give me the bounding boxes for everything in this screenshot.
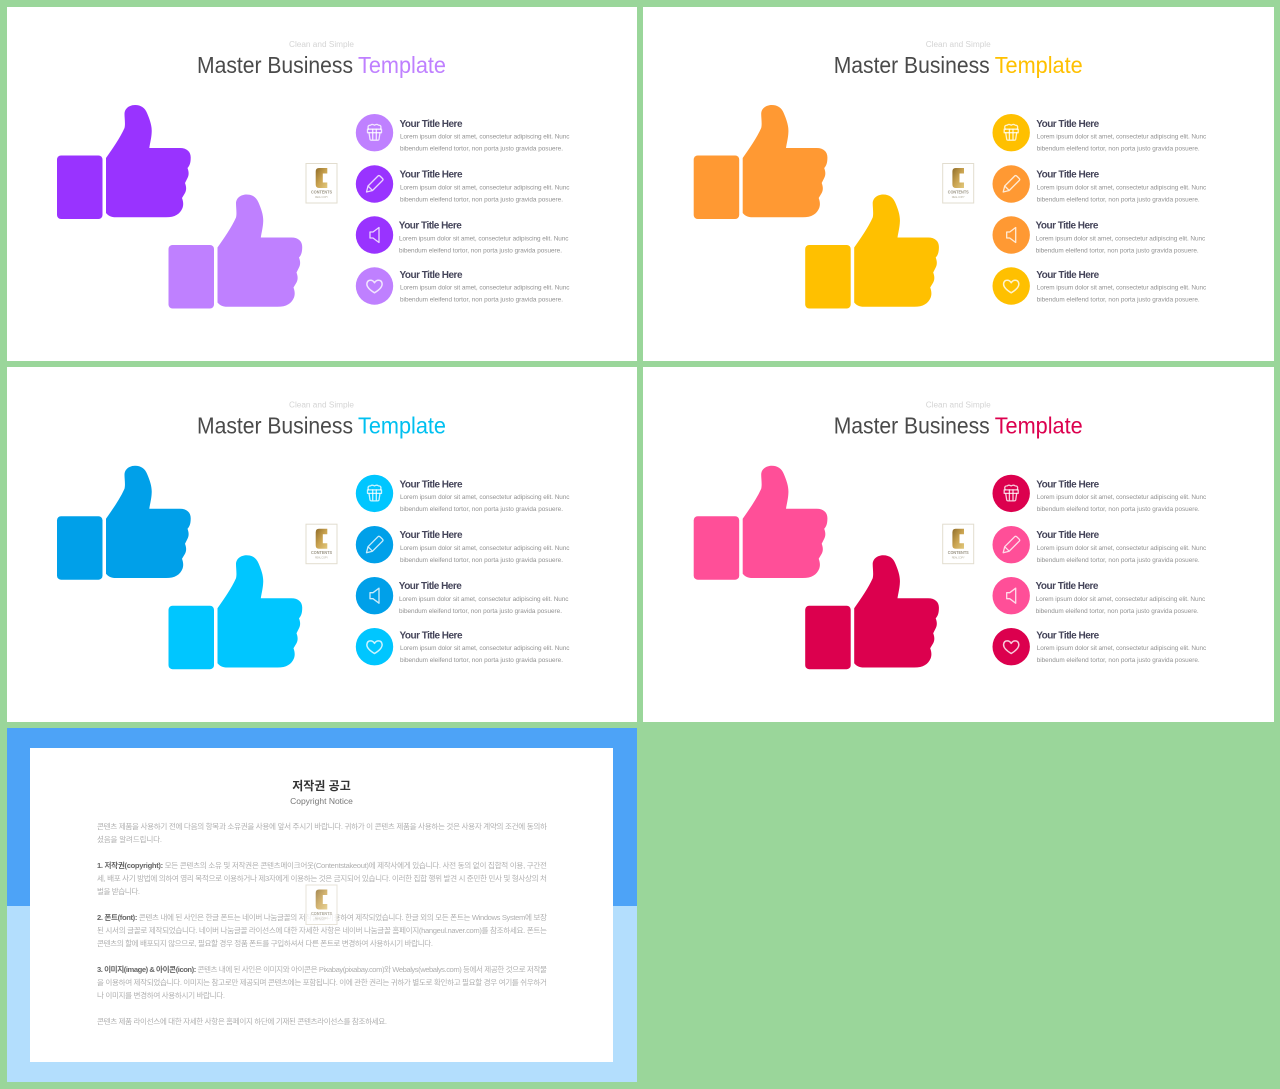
logo overlay xyxy=(306,885,337,924)
item 2 xyxy=(992,526,1207,564)
item 2: bibendum eleifend tortor, non porta justo gravida posuere. xyxy=(400,196,563,204)
logo xyxy=(943,524,974,564)
item 2: Your Title Here xyxy=(400,530,463,541)
copyright subheading: Copyright Notice xyxy=(290,796,353,806)
intro paragraph: 콘텐츠 제품을 사용하기 전에 다음의 항목과 소유권을 사용에 앞서 주시기 바랍니다. 귀하가 이 콘텐츠 제품을 사용하는 것은 사용자 계약의 조건에 동의하 xyxy=(97,821,547,831)
title xyxy=(834,52,1083,78)
section 1: copyright: 세, 배포 사기 방법에 의하여 영리 목적으로 이용하거나 제3자에게 이용하는 것은 금지되어 있습니다. 이러한 집합 행위 발견 시 준민한 민사 및 형사상의 처 xyxy=(97,873,547,883)
item 3 xyxy=(992,577,1206,615)
logo: REAL COPY xyxy=(315,556,328,560)
item 3: bibendum eleifend tortor, non porta justo gravida posuere. xyxy=(1036,608,1199,615)
panel: pink slide xyxy=(643,367,1274,722)
title: Template xyxy=(358,413,446,439)
item 2: Lorem ipsum dolor sit amet, consectetur adipiscing elit. Nunc xyxy=(1037,184,1207,192)
section 3: image and icon: 3. 이미지(image) & 아이콘(icon): 콘텐츠 내에 된 사인은 이미지와 아이콘은 Pixabay(pixabay.com)와 Webalys(webalys.com) 등에서 제공한 것으로 저작물 xyxy=(97,964,547,974)
title xyxy=(834,413,1083,439)
item 1: Lorem ipsum dolor sit amet, consectetur adipiscing elit. Nunc xyxy=(1037,134,1207,140)
closing note: 콘텐츠 제품 라이선스에 대한 자세한 사항은 홈페이지 하단에 기재된 콘텐츠라이선스를 참조하세요. xyxy=(97,1016,387,1026)
item 3: Lorem ipsum dolor sit amet, consectetur adipiscing elit. Nunc xyxy=(1036,236,1206,242)
item 1 xyxy=(992,475,1207,513)
eyebrow text: Clean and Simple xyxy=(289,401,355,410)
intro paragraph xyxy=(97,821,547,844)
item 1: bibendum eleifend tortor, non porta justo gravida posuere. xyxy=(400,506,563,513)
item 4: bibendum eleifend tortor, non porta justo gravida posuere. xyxy=(1037,296,1200,304)
panel: blue slide xyxy=(7,367,637,722)
logo overlay: CONTENTS xyxy=(311,911,333,917)
item 1: bibendum eleifend tortor, non porta justo gravida posuere. xyxy=(1037,146,1200,152)
icon: cyan thumbs up xyxy=(168,555,302,669)
item 3: Lorem ipsum dolor sit amet, consectetur adipiscing elit. Nunc xyxy=(399,236,569,242)
item 2: bibendum eleifend tortor, non porta justo gravida posuere. xyxy=(400,557,563,564)
item 4: Lorem ipsum dolor sit amet, consectetur adipiscing elit. Nunc xyxy=(400,284,570,292)
title: Master Business xyxy=(197,413,353,439)
item 4: bibendum eleifend tortor, non porta justo gravida posuere. xyxy=(400,657,563,664)
item 1: bibendum eleifend tortor, non porta justo gravida posuere. xyxy=(1037,506,1200,513)
item 1: Lorem ipsum dolor sit amet, consectetur adipiscing elit. Nunc xyxy=(1037,494,1207,501)
item 2: Lorem ipsum dolor sit amet, consectetur adipiscing elit. Nunc xyxy=(1037,545,1207,552)
item 3: Your Title Here xyxy=(1036,220,1099,232)
title: Master Business xyxy=(834,413,990,439)
section 2: font: 2. 폰트(font): 콘텐츠 내에 된 사인은 한글 폰트는 네이버 나눔글꼴의 저작물을 이용하여 제작되었습니다. 한글 외의 모든 폰트는 Windows System에 보장 xyxy=(97,912,547,922)
item 4 xyxy=(356,267,570,305)
item 2: Your Title Here xyxy=(400,170,463,180)
item 1: Your Title Here xyxy=(1036,480,1100,491)
item 4 xyxy=(356,628,570,665)
item 3: bibendum eleifend tortor, non porta justo gravida posuere. xyxy=(399,608,562,615)
section 3: image and icon: 을 이용하여 제작되었습니다. 이미지는 참고로만 제공되며 콘텐츠에는 포함됩니다. 이에 관한 권리는 귀하가 별도로 확인하고 필요할 경우 여기를 쉬우하거 xyxy=(97,977,547,987)
section 1: copyright xyxy=(97,860,547,896)
item 3: Your Title Here xyxy=(399,581,462,592)
item 1: Lorem ipsum dolor sit amet, consectetur adipiscing elit. Nunc xyxy=(400,134,570,140)
item 2: bibendum eleifend tortor, non porta justo gravida posuere. xyxy=(1037,196,1200,204)
panel: copyright notice xyxy=(7,728,637,1082)
logo xyxy=(306,164,337,203)
title xyxy=(197,52,446,78)
icon: pink thumbs up xyxy=(694,466,827,580)
item 3: Lorem ipsum dolor sit amet, consectetur adipiscing elit. Nunc xyxy=(399,596,569,603)
logo overlay: REAL COPY xyxy=(315,916,328,920)
title: Template xyxy=(358,52,446,78)
item 1: bibendum eleifend tortor, non porta justo gravida posuere. xyxy=(400,146,563,152)
item 1 xyxy=(356,475,570,513)
item 4 xyxy=(992,267,1207,305)
item 3 xyxy=(356,216,569,254)
logo: CONTENTS xyxy=(948,550,969,556)
icon: dark thumbs up xyxy=(57,105,191,219)
eyebrow text: Clean and Simple xyxy=(926,40,991,49)
item 2: bibendum eleifend tortor, non porta justo gravida posuere. xyxy=(1037,557,1200,564)
item 1 xyxy=(356,114,570,152)
item 4: Lorem ipsum dolor sit amet, consectetur adipiscing elit. Nunc xyxy=(400,645,570,652)
item 2: Lorem ipsum dolor sit amet, consectetur adipiscing elit. Nunc xyxy=(400,545,570,552)
item 3: Lorem ipsum dolor sit amet, consectetur adipiscing elit. Nunc xyxy=(1036,596,1206,603)
item 4: Your Title Here xyxy=(1036,631,1100,642)
logo: CONTENTS xyxy=(311,550,333,556)
section 2: font: 된 시서의 글꼴로 제작되었습니다. 네이버 나눔글꼴 라이선스에 대한 자세한 사항은 네이버 나눔글꼴 홈페이지(hangeul.naver.com)를 참조하세요. 폰트는 xyxy=(97,925,547,935)
item 2: Your Title Here xyxy=(1036,530,1100,541)
logo: REAL COPY xyxy=(952,556,965,560)
item 3: bibendum eleifend tortor, non porta justo gravida posuere. xyxy=(1036,248,1199,254)
title: Master Business xyxy=(834,52,990,78)
item 1: Your Title Here xyxy=(1036,119,1100,130)
title: Template xyxy=(995,52,1083,78)
icon: blue thumbs up xyxy=(57,466,191,580)
copyright heading: 저작권 공고 xyxy=(292,778,351,793)
section 3: image and icon xyxy=(97,964,547,1000)
item 2 xyxy=(356,165,570,204)
item 3 xyxy=(992,216,1206,254)
eyebrow text: Clean and Simple xyxy=(926,401,991,410)
item 3: Your Title Here xyxy=(1036,581,1099,592)
intro paragraph: 셨음을 알려드립니다. xyxy=(97,834,162,844)
logo xyxy=(943,164,974,203)
item 1: Your Title Here xyxy=(400,480,463,491)
item 4: bibendum eleifend tortor, non porta justo gravida posuere. xyxy=(400,296,563,304)
section 2: font xyxy=(97,912,547,948)
item 4: Your Title Here xyxy=(400,631,463,642)
icon: crimson thumbs up xyxy=(805,555,939,669)
item 1: Lorem ipsum dolor sit amet, consectetur adipiscing elit. Nunc xyxy=(400,494,570,501)
item 4 xyxy=(992,628,1207,665)
item 1 xyxy=(992,114,1207,152)
item 4: Your Title Here xyxy=(1036,270,1100,281)
logo: REAL COPY xyxy=(315,195,328,199)
icon: yellow thumbs up xyxy=(805,194,939,308)
panel: purple slide xyxy=(7,7,637,361)
item 3 xyxy=(356,577,569,615)
item 2 xyxy=(992,165,1207,204)
item 4: bibendum eleifend tortor, non porta justo gravida posuere. xyxy=(1037,657,1200,664)
item 2: Lorem ipsum dolor sit amet, consectetur adipiscing elit. Nunc xyxy=(400,184,570,192)
panel: orange slide xyxy=(643,7,1274,361)
logo: REAL COPY xyxy=(952,195,965,199)
title: Master Business xyxy=(197,52,353,78)
section 2: font: 콘텐츠의 할에 배포되지 않으므로, 필요할 경우 정품 폰트를 구입하셔서 다른 폰트로 변경하여 사용하시기 바랍니다. xyxy=(97,938,433,948)
logo: CONTENTS xyxy=(948,190,969,196)
title xyxy=(197,413,446,439)
section 1: copyright: 1. 저작권(copyright): 모든 콘텐츠의 소유 및 저작권은 콘텐츠메이크어웃(Contentstakeout)에 제작사에게 있습니다. 사전 동의 없이 집합적 이용, 구간전 xyxy=(97,860,547,870)
eyebrow text: Clean and Simple xyxy=(289,40,355,49)
logo xyxy=(306,524,337,564)
item 1: Your Title Here xyxy=(400,119,463,130)
item 4: Lorem ipsum dolor sit amet, consectetur adipiscing elit. Nunc xyxy=(1037,645,1207,652)
item 4: Lorem ipsum dolor sit amet, consectetur adipiscing elit. Nunc xyxy=(1037,284,1207,292)
item 2 xyxy=(356,526,570,564)
logo: CONTENTS xyxy=(311,190,333,196)
item 4: Your Title Here xyxy=(400,270,463,281)
title: Template xyxy=(995,413,1083,439)
item 3: Your Title Here xyxy=(399,220,462,232)
section 3: image and icon: 나 이미지를 변경하여 사용하시기 바랍니다. xyxy=(97,990,225,1000)
item 2: Your Title Here xyxy=(1036,170,1100,180)
icon: light thumbs up xyxy=(168,194,302,308)
icon: orange thumbs up xyxy=(694,105,827,219)
item 3: bibendum eleifend tortor, non porta justo gravida posuere. xyxy=(399,248,562,254)
section 1: copyright: 벌을 받습니다. xyxy=(97,886,140,896)
